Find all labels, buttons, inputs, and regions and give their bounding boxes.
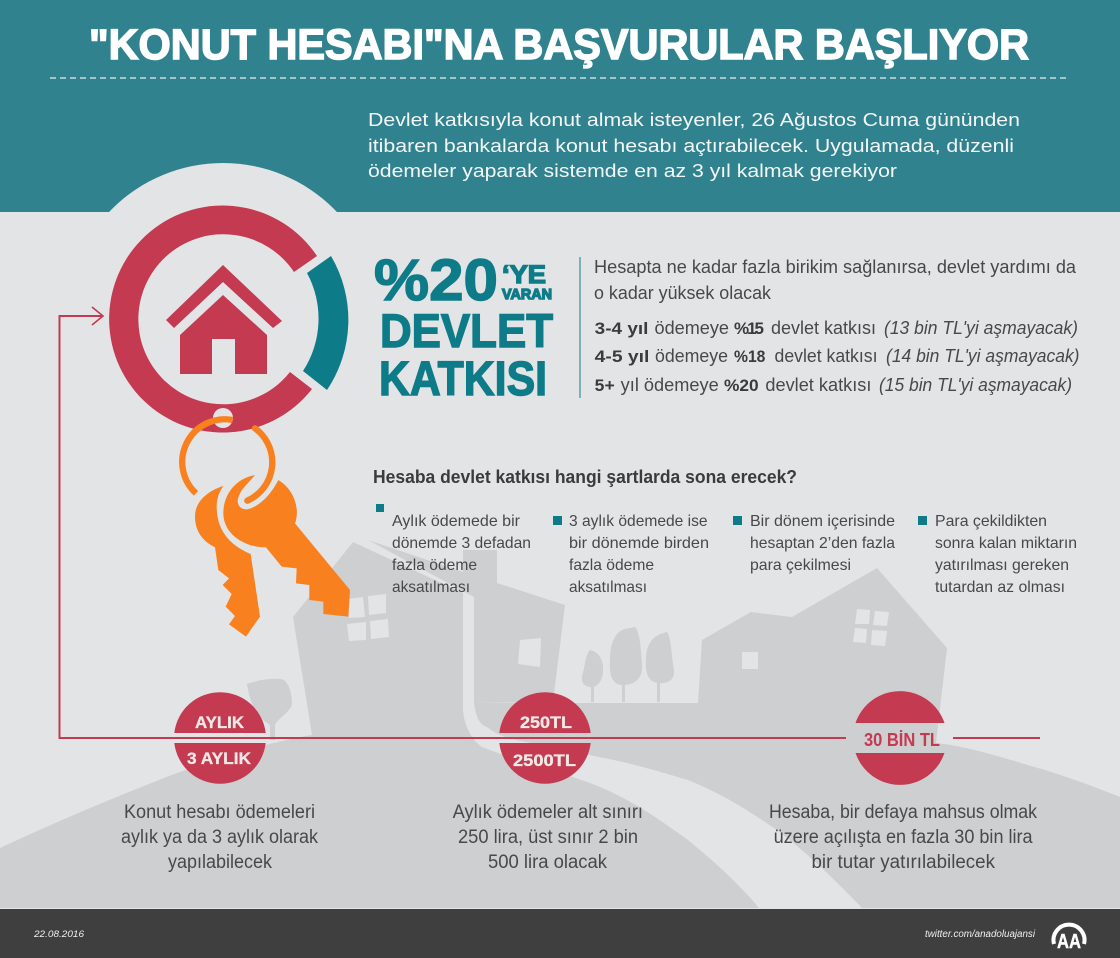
right key xyxy=(223,475,350,617)
dashed divider xyxy=(50,77,1070,79)
condition 1: aksatılması xyxy=(392,579,470,596)
condition 1: dönemde 3 defadan xyxy=(392,535,531,552)
condition 4: sonra kalan miktarın xyxy=(935,535,1077,552)
middle house window xyxy=(742,652,758,669)
grey neighbourhood silhouette xyxy=(0,540,1120,908)
caption 2 xyxy=(453,802,643,873)
right hill and houses xyxy=(474,568,1120,908)
row: 4-5 yıl: %18 xyxy=(734,347,765,366)
condition 4 xyxy=(918,513,1077,596)
condition 2: aksatılması xyxy=(569,579,647,596)
contribution details: o kadar yüksek olacak xyxy=(594,283,772,303)
row: 3-4 yıl: 3-4 yıl xyxy=(595,319,648,338)
trees xyxy=(582,627,674,702)
condition 3: Bir dönem içerisinde xyxy=(750,513,895,530)
twitter handle: twitter.com/anadoluajansi xyxy=(925,929,1036,940)
badge: 250TL / 2500TL: 250TL xyxy=(520,713,572,732)
condition 3: para çekilmesi xyxy=(750,557,851,574)
left hill and front house xyxy=(0,542,759,908)
condition 3: hesaptan 2’den fazla xyxy=(750,535,895,552)
caption 3: üzere açılışta en fazla 30 bin lira xyxy=(774,827,1033,848)
heading: %20'ye varan devlet katkısı: %20 xyxy=(374,248,498,313)
title: "KONUT HESABI"NA BAŞVURULAR BAŞLIYOR xyxy=(89,21,1029,69)
red ring arc xyxy=(109,206,317,433)
icon: orange keys xyxy=(182,419,350,637)
condition 2 xyxy=(553,513,709,596)
condition 1: fazla ödeme xyxy=(392,557,477,574)
condition 2: bir dönemde birden xyxy=(569,535,709,552)
heading: %20'ye varan devlet katkısı xyxy=(374,248,553,406)
condition 4: Para çekildikten xyxy=(935,513,1047,530)
conditions heading: Hesaba devlet katkısı hangi şartlarda sona erecek? xyxy=(373,467,797,487)
intro paragraph xyxy=(368,109,1020,181)
caption 2: 500 lira olacak xyxy=(488,852,607,873)
left key xyxy=(195,486,260,637)
icon: house xyxy=(166,265,282,374)
vertical divider xyxy=(579,257,581,398)
mailbox xyxy=(247,679,292,740)
badge: 30 bin TL xyxy=(856,691,944,785)
row: 3-4 yıl: (13 bin TL'yi aşmayacak) xyxy=(884,318,1078,338)
row: 5+ yıl: yıl ödemeye xyxy=(621,375,719,395)
back house window xyxy=(518,638,541,667)
caption 3 xyxy=(769,802,1037,873)
condition 1 xyxy=(376,504,531,596)
badge: 250TL / 2500TL xyxy=(499,692,591,784)
right house window xyxy=(853,609,889,646)
caption 2: 250 lira, üst sınır 2 bin xyxy=(458,827,638,848)
caption 2: Aylık ödemeler alt sınırı xyxy=(453,802,643,823)
row: 3-4 yıl: ödemeye xyxy=(654,318,729,338)
row: 4-5 yıl: ödemeye xyxy=(655,346,728,366)
intro paragraph: itibaren bankalarda konut hesabı açtırabilecek. Uygulamada, düzenli xyxy=(368,135,1014,156)
row: 5+ yıl: (15 bin TL'yi aşmayacak) xyxy=(879,375,1072,395)
background circle behind house emblem xyxy=(66,163,380,477)
back house with chimney xyxy=(368,540,565,703)
arrow: timeline to emblem xyxy=(60,307,1040,738)
condition 3 xyxy=(733,513,895,574)
teal ring arc xyxy=(303,256,348,390)
heading: %20'ye varan devlet katkısı: KATKISI xyxy=(379,353,547,406)
caption 1: aylık ya da 3 aylık olarak xyxy=(121,827,318,848)
badge: aylık / 3 aylık: 3 AYLIK xyxy=(187,749,252,768)
condition 4: yatırılması gereken xyxy=(935,557,1069,574)
icon: AA logo: AA xyxy=(1057,931,1081,953)
condition 4: tutardan az olması xyxy=(935,579,1065,596)
row: 4-5 yıl: 4-5 yıl xyxy=(595,347,649,366)
contribution details xyxy=(594,257,1080,395)
caption 3: bir tutar yatırılabilecek xyxy=(812,852,995,873)
icon: AA logo xyxy=(1054,925,1085,953)
red ring with house xyxy=(109,206,348,433)
date: 22.08.2016 xyxy=(33,929,85,940)
front house window xyxy=(347,594,389,641)
badge: 30 bin TL: 30 BİN TL xyxy=(864,730,940,750)
caption 1: yapılabilecek xyxy=(168,852,272,873)
condition 2: 3 aylık ödemede ise xyxy=(569,513,708,530)
row: 5+ yıl: %20 xyxy=(724,376,759,395)
row: 3-4 yıl: devlet katkısı xyxy=(771,318,876,338)
condition 2: fazla ödeme xyxy=(569,557,654,574)
row: 3-4 yıl: %15 xyxy=(734,319,764,338)
caption 1: Konut hesabı ödemeleri xyxy=(124,802,315,823)
contribution details: Hesapta ne kadar fazla birikim sağlanırsa, devlet yardımı da xyxy=(594,257,1077,277)
condition 1: Aylık ödemede bir xyxy=(392,513,521,530)
footer bar xyxy=(0,909,1120,958)
row: 4-5 yıl: devlet katkısı xyxy=(774,346,878,366)
badge: 250TL / 2500TL: 2500TL xyxy=(513,751,576,770)
heading: %20'ye varan devlet katkısı: VARAN xyxy=(502,286,552,303)
keyring hole xyxy=(213,408,233,428)
heading: %20'ye varan devlet katkısı: DEVLET xyxy=(380,304,553,357)
intro paragraph: Devlet katkısıyla konut almak isteyenler, 26 Ağustos Cuma gününden xyxy=(368,109,1020,130)
key ring xyxy=(182,419,233,493)
row: 5+ yıl xyxy=(595,375,1072,395)
heading: %20'ye varan devlet katkısı: ‘YE xyxy=(502,261,546,289)
row: 5+ yıl: 5+ xyxy=(595,376,615,395)
row: 3-4 yıl xyxy=(595,318,1078,338)
row: 4-5 yıl: (14 bin TL'yi aşmayacak) xyxy=(886,346,1080,366)
row: 4-5 yıl xyxy=(595,346,1080,366)
row: 5+ yıl: devlet katkısı xyxy=(765,375,871,395)
badge: aylık / 3 aylık: AYLIK xyxy=(195,713,245,732)
caption 3: Hesaba, bir defaya mahsus olmak xyxy=(769,802,1037,823)
teal header band xyxy=(0,0,1120,212)
intro paragraph: ödemeler yaparak sistemde en az 3 yıl kalmak gerekiyor xyxy=(368,160,897,181)
caption 1 xyxy=(121,802,318,873)
badge: aylık / 3 aylık xyxy=(174,692,266,784)
